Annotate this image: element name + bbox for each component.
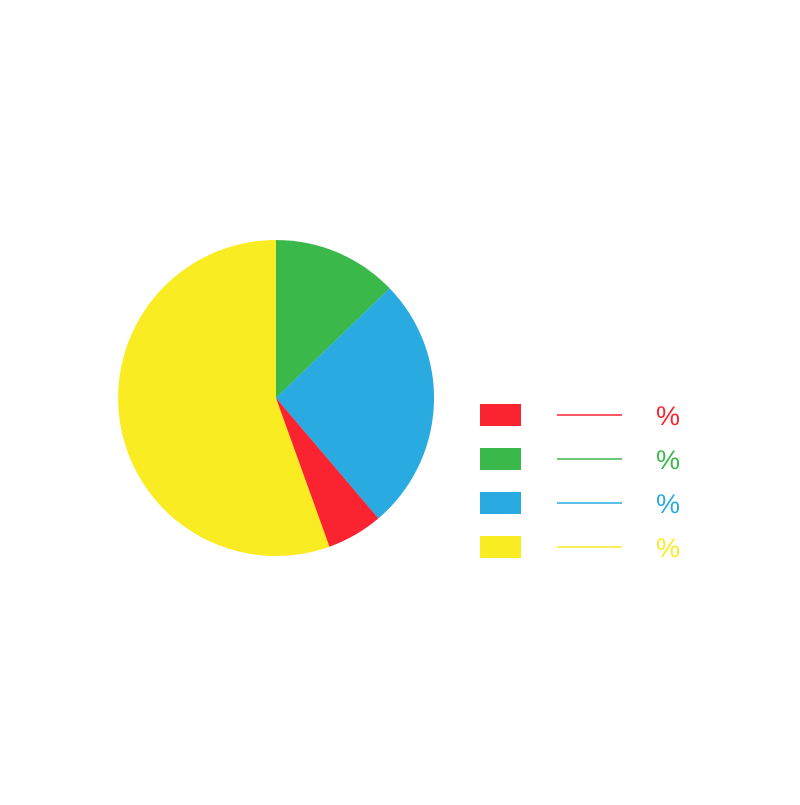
legend item: yellow: % [656,533,680,563]
legend item: yellow [480,533,680,563]
slice: blue [276,288,434,518]
legend item: blue: % [656,489,680,519]
legend item: red: % [656,401,680,431]
legend [480,401,680,563]
slice: yellow [118,240,330,556]
slice: green [276,240,390,398]
pie chart [118,240,434,556]
legend item: green [480,445,680,475]
legend item: green: % [656,445,680,475]
legend item: blue [480,489,680,519]
legend item: red [480,401,680,431]
slice: red [276,398,378,547]
